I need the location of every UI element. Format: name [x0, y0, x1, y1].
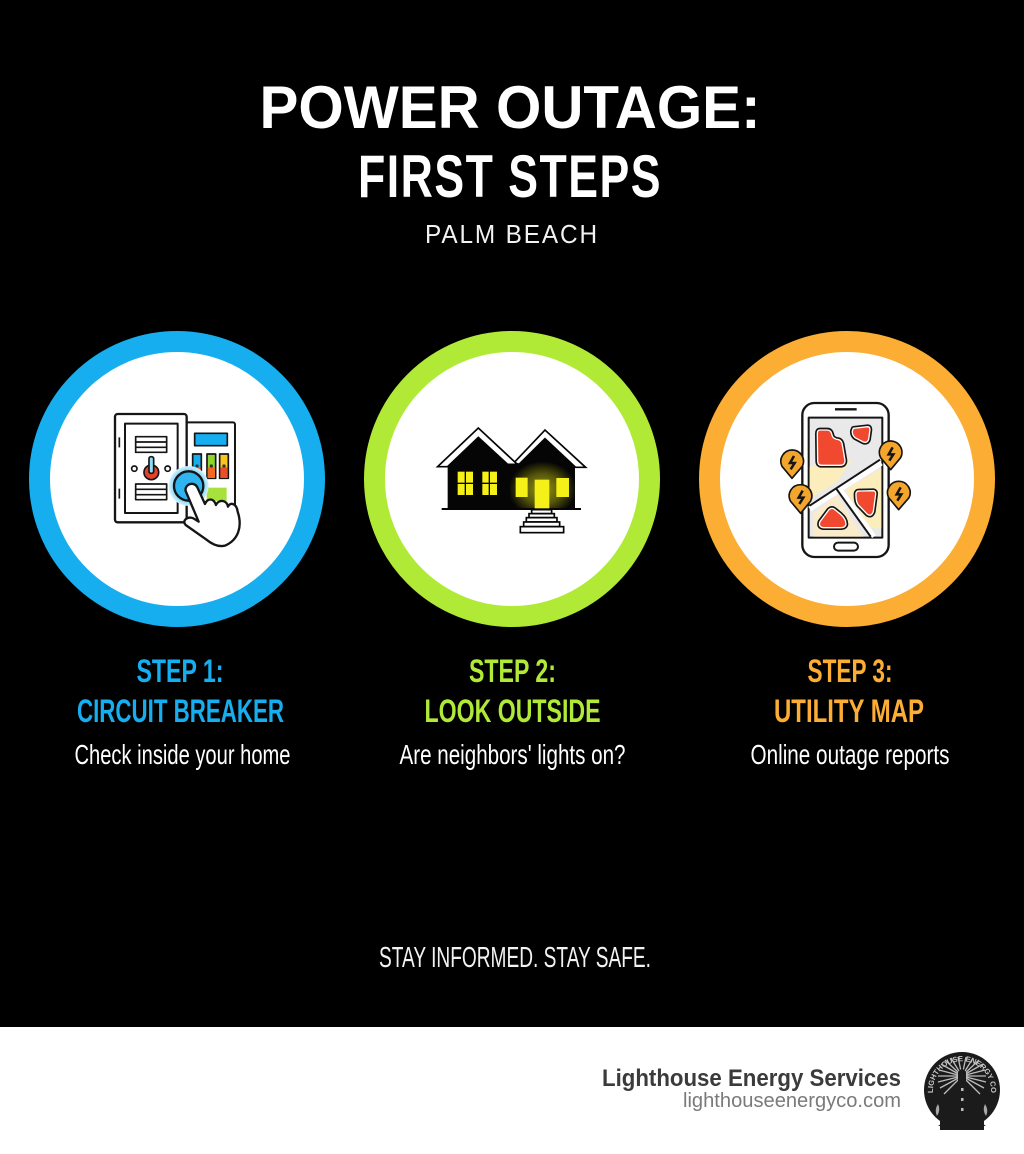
subtitle: PALM BEACH: [425, 219, 599, 249]
title: [260, 74, 760, 210]
step 2 label: STEP 2:: [469, 653, 556, 689]
panel: step 2: [374, 342, 650, 770]
website: lighthouseenergyco.com: [683, 1090, 901, 1112]
footer band: [0, 1027, 1024, 1154]
company name: Lighthouse Energy Services: [602, 1065, 901, 1092]
tagline: STAY INFORMED. STAY SAFE.: [379, 942, 651, 974]
icon: house with lit windows: [438, 428, 586, 533]
step 3 description: Online outage reports: [750, 739, 950, 770]
step 2 description: Are neighbors' lights on?: [400, 739, 626, 770]
step 3 label: STEP 3:: [808, 653, 892, 689]
icon: circuit breaker panel with pointing hand: [115, 414, 240, 546]
title: FIRST STEPS: [358, 143, 662, 210]
step 2 ring: [374, 342, 650, 616]
logo: lighthouse badge: LIGHTHOUSE ENERGY CO: [928, 1056, 996, 1093]
panel: step 3: [710, 342, 984, 770]
panel: step 1: [40, 342, 314, 770]
step 1 label: STEP 1:: [136, 653, 224, 689]
step 1 name: CIRCUIT BREAKER: [77, 693, 284, 729]
step 2 name: LOOK OUTSIDE: [424, 693, 600, 729]
step 1 description: Check inside your home: [74, 739, 290, 770]
step 1 ring: [40, 342, 314, 616]
step 3 ring: [710, 342, 984, 616]
icon: phone with outage map: [781, 403, 910, 557]
step 3 name: UTILITY MAP: [774, 693, 924, 729]
logo: lighthouse badge: [924, 1052, 1000, 1130]
title: POWER OUTAGE:: [260, 74, 760, 141]
